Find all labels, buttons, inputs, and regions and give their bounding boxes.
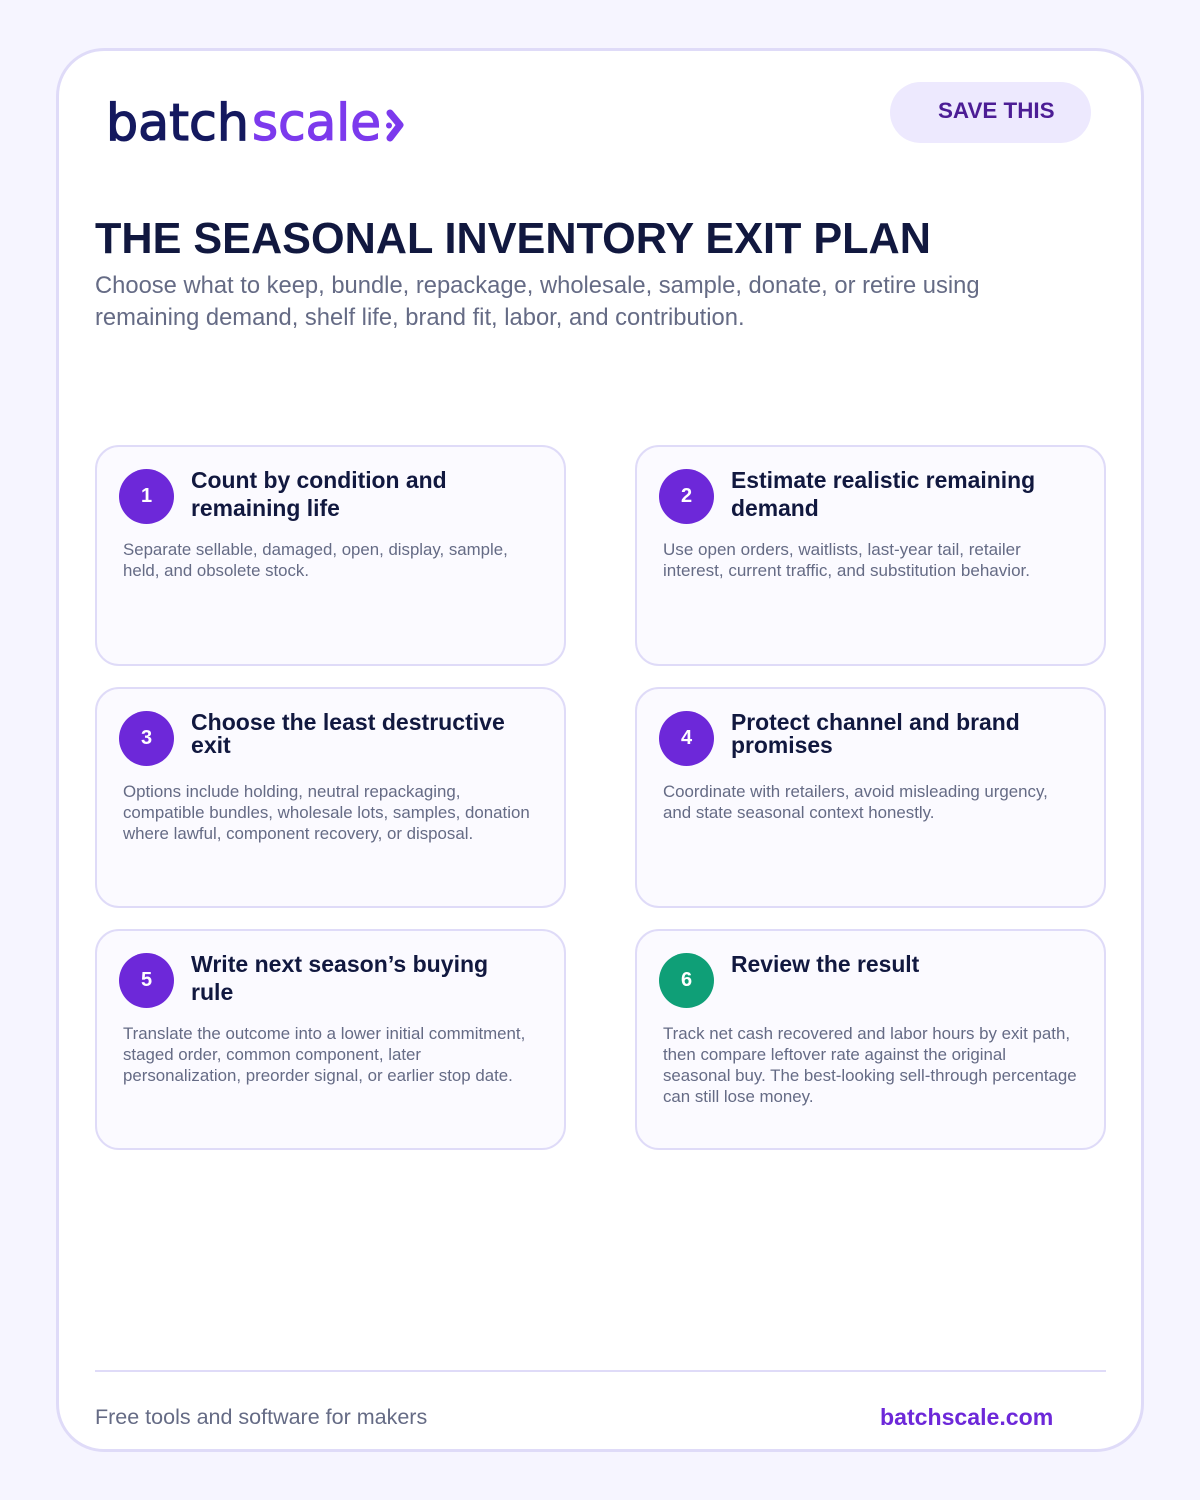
- step 2 heading: [731, 467, 1035, 521]
- step 1 heading: remaining life: [191, 495, 340, 521]
- step 2 heading: Estimate realistic remaining: [731, 467, 1035, 493]
- panel: step 5: [95, 929, 566, 1150]
- step 5 heading: [191, 951, 488, 1005]
- step 2 text: [663, 540, 1030, 580]
- step 3 heading: exit: [191, 732, 231, 758]
- step 3 heading: Choose the least destructive: [191, 709, 505, 735]
- logo: batchscale: scale: [252, 94, 381, 153]
- step 1 heading: [191, 467, 447, 521]
- subtitle: [95, 272, 980, 331]
- step 6 text: Track net cash recovered and labor hours by exit path,: [663, 1024, 1070, 1043]
- footer website: batchscale.com: [880, 1404, 1053, 1430]
- step 1 text: [123, 540, 508, 580]
- step number 5: [119, 953, 174, 1008]
- step number 5: 5: [141, 969, 152, 991]
- logo: batchscale: [106, 94, 404, 153]
- step 6 text: [663, 1024, 1077, 1106]
- step number 3: [119, 711, 174, 766]
- step number 6: [659, 953, 714, 1008]
- step 4 text: and state seasonal context honestly.: [663, 803, 934, 822]
- step 3 text: compatible bundles, wholesale lots, samples, donation: [123, 803, 530, 822]
- step 3 text: where lawful, component recovery, or disposal.: [123, 824, 473, 843]
- panel: step 2: [635, 445, 1106, 666]
- step number 2: [659, 469, 714, 524]
- step 6 text: seasonal buy. The best-looking sell-through percentage: [663, 1066, 1077, 1085]
- step 3 text: Options include holding, neutral repackaging,: [123, 782, 460, 801]
- step 1 text: Separate sellable, damaged, open, display, sample,: [123, 540, 508, 559]
- panel: step 4: [635, 687, 1106, 908]
- step number 4: 4: [681, 727, 692, 749]
- step 4 heading: Protect channel and brand: [731, 709, 1020, 735]
- step 4 text: Coordinate with retailers, avoid misleading urgency,: [663, 782, 1048, 801]
- step 1 text: held, and obsolete stock.: [123, 561, 309, 580]
- logo: batchscale: batch: [106, 94, 249, 153]
- step 6 text: then compare leftover rate against the original: [663, 1045, 1006, 1064]
- panel: step 3: [95, 687, 566, 908]
- subtitle: Choose what to keep, bundle, repackage, wholesale, sample, donate, or retire using: [95, 272, 980, 299]
- step 5 text: [123, 1024, 525, 1085]
- step number 1: 1: [141, 485, 152, 507]
- panel: step 6: [635, 929, 1106, 1150]
- step 1 heading: Count by condition and: [191, 467, 447, 493]
- step 6 text: can still lose money.: [663, 1087, 814, 1106]
- step 4 heading: [731, 709, 1020, 758]
- step 4 text: [663, 782, 1048, 822]
- footer tagline: Free tools and software for makers: [95, 1405, 427, 1429]
- panel: step 1: [95, 445, 566, 666]
- step 4 heading: promises: [731, 732, 833, 758]
- step 5 text: staged order, common component, later: [123, 1045, 421, 1064]
- step number 2: 2: [681, 485, 692, 507]
- step 5 heading: rule: [191, 979, 233, 1005]
- title: THE SEASONAL INVENTORY EXIT PLAN: [95, 215, 931, 263]
- step 5 text: personalization, preorder signal, or earlier stop date.: [123, 1066, 513, 1085]
- step number 3: 3: [141, 727, 152, 749]
- save this badge: [890, 82, 1091, 143]
- save this badge: SAVE THIS: [938, 98, 1055, 123]
- step 2 text: interest, current traffic, and substitution behavior.: [663, 561, 1030, 580]
- step 2 heading: demand: [731, 495, 819, 521]
- subtitle: remaining demand, shelf life, brand fit, labor, and contribution.: [95, 304, 745, 331]
- step 5 text: Translate the outcome into a lower initial commitment,: [123, 1024, 525, 1043]
- step number 1: [119, 469, 174, 524]
- step 2 text: Use open orders, waitlists, last-year tail, retailer: [663, 540, 1021, 559]
- step 5 heading: Write next season’s buying: [191, 951, 488, 977]
- step number 6: 6: [681, 969, 692, 991]
- step 3 text: [123, 782, 530, 843]
- step 6 heading: Review the result: [731, 951, 919, 977]
- step number 4: [659, 711, 714, 766]
- step 3 heading: [191, 709, 505, 758]
